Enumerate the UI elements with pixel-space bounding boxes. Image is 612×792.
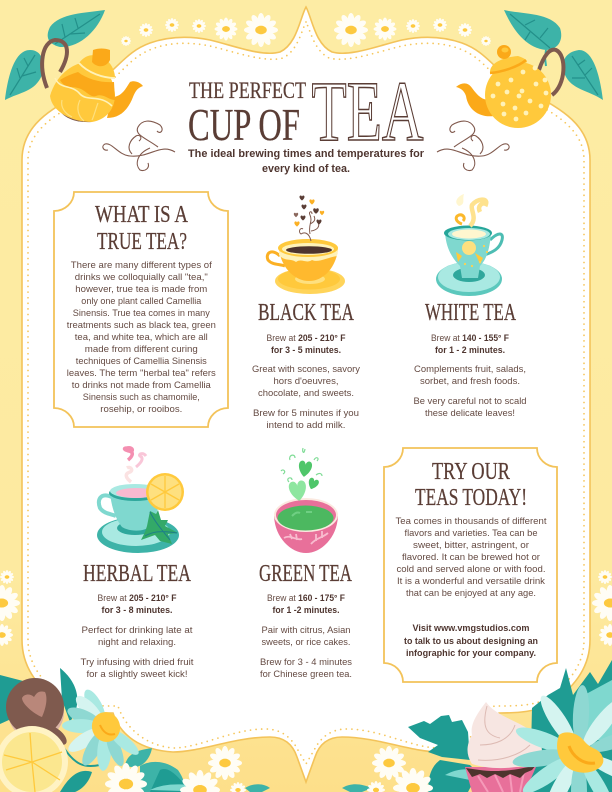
text: green tea details: sweets, or rice cakes. bbox=[262, 637, 350, 648]
text: call to action: Visit www.vmgstudios.com bbox=[412, 623, 530, 634]
text: white tea details: Be very careful not to scald bbox=[414, 396, 526, 407]
text: green tea details bbox=[260, 593, 352, 680]
text: black tea details: Brew at 205 - 210° F bbox=[266, 333, 346, 344]
top daisies bbox=[121, 13, 491, 47]
text: try our teas description: sweet, bitter, astringent, or bbox=[413, 540, 529, 551]
text: true tea description bbox=[67, 260, 216, 415]
text: true tea description: to drinks not made from Camellia bbox=[72, 380, 212, 391]
text: try our teas description: flavors and varieties. Tea can be bbox=[404, 528, 538, 539]
side daisies bbox=[0, 570, 612, 646]
heading: try our teas today: TRY OUR bbox=[432, 459, 510, 485]
title: THE PERFECT bbox=[189, 78, 306, 103]
icon: right teapot with leaves bbox=[456, 10, 603, 128]
text: true tea description: drinks we colloquially call "tea," bbox=[75, 272, 208, 283]
text: green tea details: for 1 -2 minutes. bbox=[272, 605, 340, 616]
text: herbal tea details: Perfect for drinking late at bbox=[82, 625, 193, 636]
text: true tea description: techniques of Camellia Sinensis bbox=[76, 356, 207, 367]
icon: green tea bowl bbox=[274, 448, 338, 553]
panel: what is a true tea bbox=[54, 192, 228, 427]
text: true tea description: Sinensis such as chamomile, bbox=[83, 392, 200, 403]
text: try our teas description bbox=[396, 516, 547, 599]
text: green tea details: Brew at 160 - 175° F bbox=[267, 593, 345, 604]
text: call to action: to talk to us about designing an bbox=[404, 636, 538, 647]
text: green tea details: Pair with citrus, Asian bbox=[262, 625, 350, 636]
text: white tea details: Brew at 140 - 155° F bbox=[431, 333, 509, 344]
text: black tea details bbox=[252, 333, 360, 431]
text: black tea details: Great with scones, savory bbox=[252, 364, 360, 375]
text: true tea description: treatments such as black tea, green bbox=[67, 320, 216, 331]
text: call to action bbox=[404, 623, 538, 659]
text: white tea details bbox=[414, 333, 526, 419]
heading: what is a true tea: WHAT IS A bbox=[95, 202, 189, 228]
icon: herbal tea cup bbox=[97, 448, 184, 553]
text: true tea description: rosehip, or rooibos. bbox=[100, 404, 182, 415]
text: true tea description: There are many different types of bbox=[71, 260, 212, 271]
text: white tea details: Complements fruit, salads, bbox=[414, 364, 526, 375]
heading: what is a true tea bbox=[95, 202, 189, 255]
text: true tea description: Sinensis. True tea comes in many bbox=[73, 308, 210, 319]
subtitle: every kind of tea. bbox=[262, 163, 350, 175]
heading: herbal tea: HERBAL TEA bbox=[83, 561, 191, 587]
text: green tea details: for Chinese green tea. bbox=[260, 669, 352, 680]
title bbox=[188, 63, 424, 159]
text: true tea description: however, true tea is made from bbox=[75, 284, 207, 295]
heading: try our teas today bbox=[415, 459, 527, 511]
text: black tea details: Brew for 5 minutes if you bbox=[253, 408, 359, 419]
text: try our teas description: flavored. It can be brewed hot or bbox=[402, 552, 540, 563]
text: herbal tea details: night and relaxing. bbox=[98, 637, 176, 648]
text: black tea details: intend to add milk. bbox=[266, 420, 346, 431]
text: try our teas description: Tea comes in thousands of different bbox=[396, 516, 547, 527]
text: true tea description: made from different curing bbox=[85, 344, 198, 355]
text: herbal tea details: for a slightly sweet kick! bbox=[86, 669, 188, 680]
title: TEA bbox=[312, 63, 424, 159]
text: white tea details: these delicate leaves! bbox=[425, 408, 515, 419]
illustration: bottom-right flower and cupcake bbox=[367, 660, 612, 792]
text: try our teas description: It is a wonderful and versatile drink bbox=[397, 576, 545, 587]
text: white tea details: for 1 - 2 minutes. bbox=[435, 345, 505, 356]
text: black tea details: for 3 - 5 minutes. bbox=[271, 345, 341, 356]
icon: left swirl bbox=[103, 121, 175, 171]
title: CUP OF bbox=[188, 100, 300, 150]
heading: green tea: GREEN TEA bbox=[259, 561, 352, 587]
text: green tea details: Brew for 3 - 4 minutes bbox=[260, 657, 352, 668]
icon: white tea cup bbox=[436, 194, 502, 296]
text: true tea description: only one plant called Camellia bbox=[81, 296, 202, 307]
icon: right swirl bbox=[437, 121, 509, 171]
illustration: bottom-left flowers, cookie and lemon bbox=[0, 668, 372, 792]
heading: white tea: WHITE TEA bbox=[425, 300, 516, 326]
subtitle: The ideal brewing times and temperatures for bbox=[188, 148, 425, 160]
panel: try our teas today bbox=[384, 448, 557, 682]
icon: left teapot with leaves bbox=[5, 10, 143, 122]
text: try our teas description: that can be enjoyed at any age. bbox=[406, 588, 536, 599]
text: true tea description: tea, and white tea, which are all bbox=[75, 332, 208, 343]
text: black tea details: hors d'oeuvres, bbox=[274, 376, 338, 387]
text: herbal tea details bbox=[80, 593, 194, 680]
text: herbal tea details: for 3 - 8 minutes. bbox=[102, 605, 172, 616]
heading: black tea: BLACK TEA bbox=[258, 300, 354, 326]
text: true tea description: leaves. The term "herbal tea" refers bbox=[67, 368, 216, 379]
text: black tea details: chocolate, and sweets. bbox=[258, 388, 354, 399]
text: call to action: infographic for your company. bbox=[406, 648, 536, 659]
subtitle bbox=[188, 148, 425, 175]
heading: what is a true tea: TRUE TEA? bbox=[97, 229, 187, 255]
text: white tea details: sorbet, and fresh foods. bbox=[420, 376, 520, 387]
icon: black tea cup bbox=[267, 196, 345, 294]
heading: try our teas today: TEAS TODAY! bbox=[415, 485, 527, 511]
text: herbal tea details: Try infusing with dried fruit bbox=[80, 657, 194, 668]
text: herbal tea details: Brew at 205 - 210° F bbox=[98, 593, 177, 604]
text: try our teas description: cold and served alone or with food. bbox=[396, 564, 546, 575]
